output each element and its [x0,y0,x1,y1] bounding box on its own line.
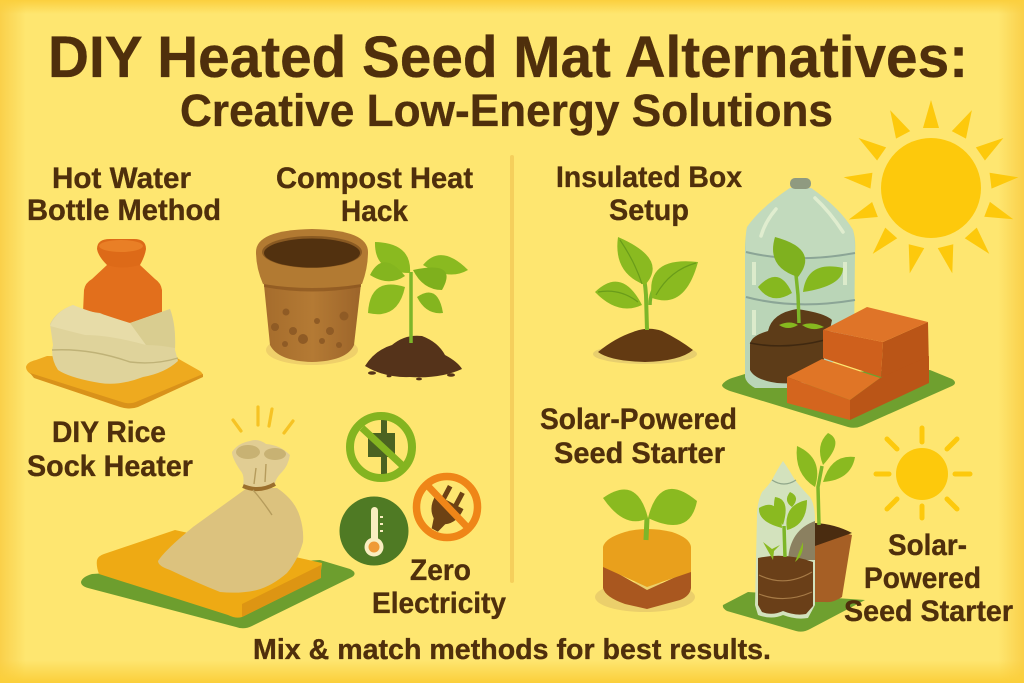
heading: insulated box setup [556,161,742,227]
icon: bottle cloche with bricks [722,178,955,428]
divider [510,155,514,583]
icon: folded mat [26,356,203,408]
heading: solar-powered seed starter [540,403,737,470]
panel: compost heat hack [256,162,473,380]
panel: solar-powered seed starter (right) [723,433,1013,632]
panel: solar-powered seed starter (left) [540,403,737,612]
icon: green mat [723,592,865,632]
icon: rice sock bag [158,440,303,593]
heading: zero electricity [372,554,506,620]
icon: folded orange towel [97,530,322,618]
heading: compost heat hack [276,162,473,228]
icon: seedling in soil [593,237,698,364]
heading: solar-powered seed starter [844,529,1013,628]
icon: no plug symbol [416,476,478,538]
heading: insulated box setup: Setup [609,194,689,227]
subtitle: Creative Low-Energy Solutions [180,85,833,136]
icon: green base mat [81,560,355,628]
title: DIY Heated Seed Mat Alternatives: [48,25,968,90]
heading: DIY rice sock heater [27,416,193,483]
panel: zero electricity [340,416,506,620]
heading: solar-powered seed starter: Powered [864,562,981,595]
icon: compost seedling [365,242,468,380]
icon: small sun [876,428,970,518]
title [48,25,968,136]
icon: cut bottle cloche [755,461,815,619]
icon: thermometer circle [340,496,408,566]
heading: compost heat hack: Compost Heat [276,162,473,195]
heading: hot water bottle: Hot Water [52,162,191,195]
heading: DIY rice sock heater: Sock Heater [27,450,193,483]
heading: insulated box setup: Insulated Box [556,161,742,194]
icon: terracotta pot [256,229,368,365]
heading: solar-powered seed starter: Solar- [888,529,967,562]
icon: no power symbol [350,416,412,478]
heading: hot water bottle: Bottle Method [27,194,221,227]
heading: zero electricity: Zero [410,554,471,587]
heading: zero electricity: Electricity [372,587,506,620]
panel: DIY rice sock heater [27,407,355,628]
heading: solar-powered seed starter: Solar-Powered [540,403,737,436]
panel: hot water bottle method [26,162,221,408]
panel: insulated box setup [556,161,742,364]
icon: soil cube seedling [595,489,697,612]
heading: compost heat hack: Hack [341,195,408,228]
heading: solar-powered seed starter: Seed Starter [554,437,725,470]
icon: plastic bottle [745,178,855,388]
heading: hot water bottle [27,162,221,227]
icon: orange bricks [787,307,929,420]
heading: DIY rice sock heater: DIY Rice [52,416,166,449]
icon: potted plant [797,433,855,602]
icon: cloth wrap [50,305,178,384]
icon: orange hot water bottle [82,239,162,335]
footer note: Mix & match methods for best results. [253,634,771,666]
icon: heat rays [233,407,293,433]
icon: large sun [843,100,1019,275]
heading: solar-powered seed starter: Seed Starter [844,595,1013,628]
icon: green mat [722,370,955,428]
